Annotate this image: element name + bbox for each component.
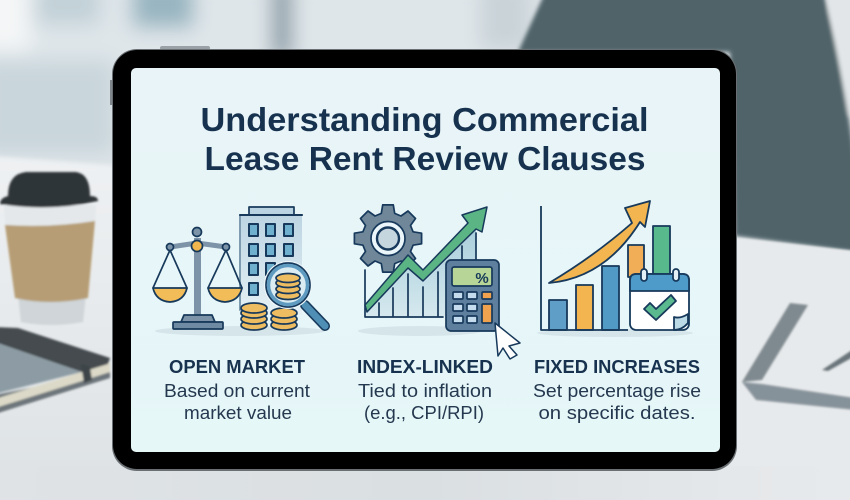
panel: index-linked: Tied to inflation [358,381,492,401]
panel: index-linked [357,357,493,423]
icon: bar chart, rising arrow and calendar [537,201,693,337]
panel: open market: Based on current [164,381,310,401]
cursor [495,323,520,359]
scales [153,228,242,329]
table surface right [730,237,850,500]
bars [541,206,670,330]
calculator [446,260,499,331]
icon: scales, building, coins and magnifier [153,207,325,336]
screen [131,68,720,452]
title: Understanding Commercial [200,101,648,138]
panel: fixed increases: FIXED INCREASES [534,357,700,377]
green arrow [365,207,487,312]
rising arrow [549,201,650,283]
panel: fixed increases [533,357,701,423]
calendar [630,269,689,330]
tablet [110,46,737,471]
table surface left [0,156,120,500]
spiral notepad and pen [742,303,850,410]
dark chair [518,0,850,252]
panel: fixed increases: on specific dates. [538,403,696,423]
gear [354,205,422,272]
magnifier [264,261,325,326]
building [240,207,302,315]
panel: fixed increases: Set percentage rise [533,381,701,401]
chart bars [365,229,476,317]
panel: open market: market value [184,403,292,423]
coffee cup [0,172,98,325]
title: Lease Rent Review Clauses [204,140,646,177]
title [200,101,648,177]
calculator: % [475,270,489,287]
icon: gear, index chart, calculator and cursor [354,205,520,359]
coins [241,303,297,330]
notebook [0,327,110,414]
panel: open market: OPEN MARKET [169,357,305,377]
panel: index-linked: INDEX-LINKED [357,357,493,377]
panel: index-linked: (e.g., CPI/RPI) [364,403,484,423]
panel: open market [164,357,310,423]
